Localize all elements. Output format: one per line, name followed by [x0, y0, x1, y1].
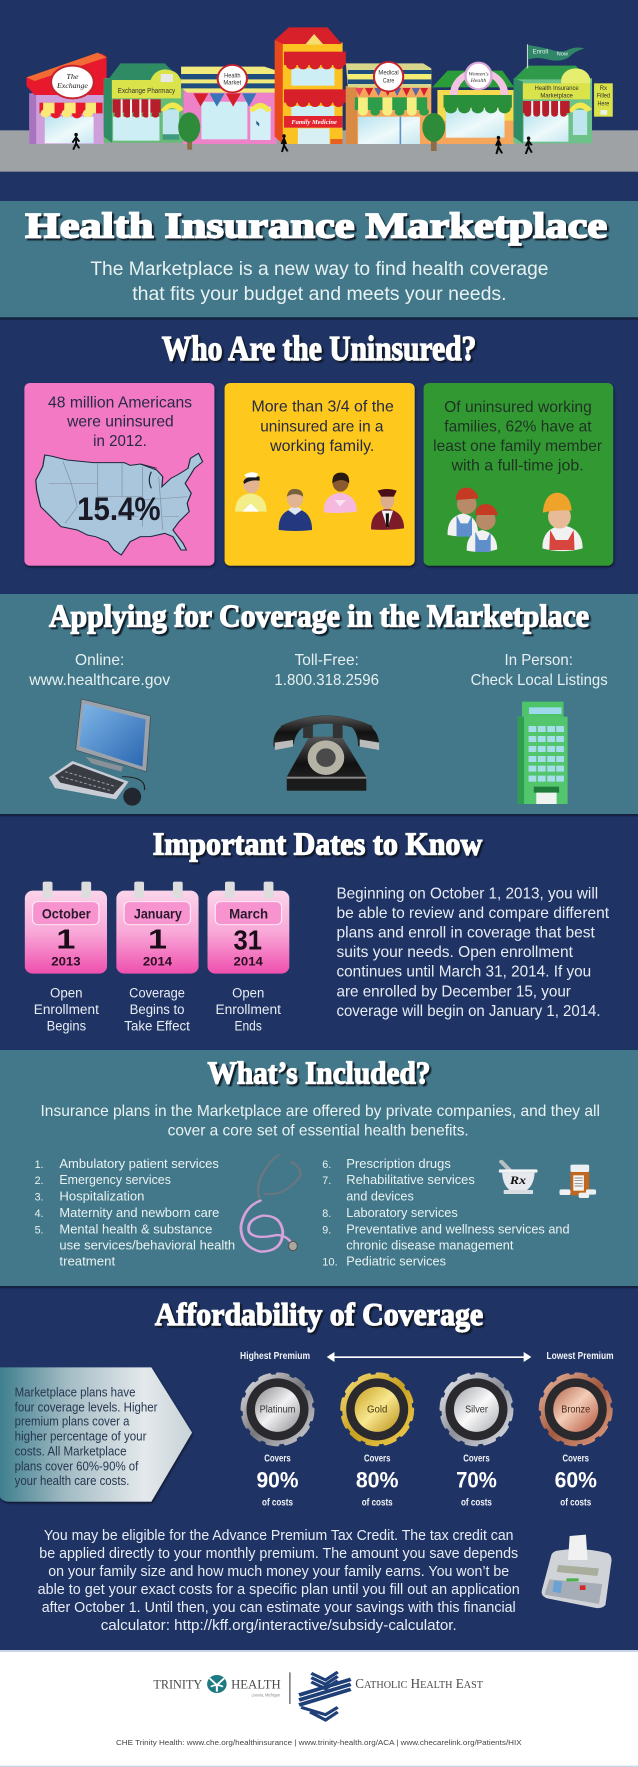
medal: Gold 80%: Covers	[364, 1454, 390, 1464]
icon: stethoscope	[241, 1155, 300, 1252]
list: benefits 6-10: 8.	[322, 1207, 331, 1220]
panel: 48 million Americans	[24, 383, 214, 566]
medal: Bronze 60%	[541, 1374, 611, 1508]
shop: Health Market	[181, 65, 277, 144]
callout: coverage levels: higher percentage of your	[15, 1430, 147, 1444]
contact: toll-free	[274, 652, 379, 689]
medal: Gold 80%: of costs	[362, 1498, 393, 1508]
section: Who Are the Uninsured	[24, 330, 613, 566]
calendar: January 1 2014: 1	[148, 923, 167, 955]
list: benefits 6-10: chronic disease management	[346, 1239, 513, 1253]
contact: in person: In Person:	[505, 652, 573, 669]
footer links: CHE Trinity Health: www.che.org/healthinsurance | www.trinity-health.org/ACA | www.checarelink.org/Patients/HIX	[116, 1738, 522, 1747]
calendar: October 1 2013: 1	[56, 923, 75, 955]
sidewalk	[0, 130, 638, 172]
medal: Gold 80%: Gold	[367, 1405, 387, 1415]
medal: Platinum 90%	[242, 1374, 313, 1508]
callout: coverage levels: Marketplace plans have	[15, 1386, 135, 1400]
panel: 48 million Americans: in 2012.	[93, 432, 147, 450]
panel: working families: Of uninsured working	[444, 398, 592, 416]
medal: Bronze 60%: Covers	[563, 1454, 589, 1464]
text: tax credit paragraph	[38, 1527, 520, 1634]
calendar: October 1 2013	[25, 882, 107, 974]
icon: nurse	[235, 472, 267, 512]
callout: coverage levels: four coverage levels. Higher	[15, 1401, 158, 1415]
medal: Gold 80%: 80%	[356, 1469, 399, 1493]
shop: Exchange Pharmacy	[104, 63, 184, 143]
shop: Exchange Pharmacy: Exchange Pharmacy	[118, 87, 176, 95]
medal: Bronze 60%: Bronze	[561, 1405, 590, 1415]
contact: online: www.healthcare.gov	[28, 672, 170, 689]
shop: Women's Health: Women's	[468, 72, 489, 77]
shop: The Exchange: The	[66, 73, 79, 81]
callout: coverage levels: plans cover 60%-90% of	[15, 1460, 139, 1474]
caption: Coverage Begins to Take Effect: Coverage	[129, 986, 185, 1001]
shop: Health Market: Market	[223, 80, 241, 86]
shop: The Exchange	[26, 53, 107, 144]
caption: Coverage Begins to Take Effect	[124, 986, 190, 1034]
flag: Enroll Now: Now	[557, 52, 569, 57]
text: tax credit paragraph: able to get your exact costs for a specific plan until you fill out an application	[38, 1581, 520, 1598]
list: benefits 6-10: Preventative and wellness services and	[346, 1223, 570, 1237]
text: tax credit paragraph: after October 1. Until then, you can estimate your savings with this financial	[42, 1599, 516, 1616]
calendar: October 1 2013: 2013	[51, 955, 81, 968]
calendar: March 31 2014: 31	[234, 924, 262, 956]
intro text: cover a core set of essential health benefits.	[168, 1122, 469, 1139]
intro text	[90, 257, 548, 304]
panel: working family: More than 3/4 of the	[251, 397, 394, 415]
panel: 48 million Americans: were uninsured	[66, 412, 174, 430]
text: tax credit paragraph: be applied directly to your monthly premium. The amount you save depends	[39, 1545, 518, 1562]
contact: online: Online:	[75, 652, 124, 669]
list: benefits 6-10: 10.	[322, 1256, 338, 1268]
list: benefits 1-5: 2.	[35, 1174, 44, 1187]
caption: Coverage Begins to Take Effect: Begins to	[130, 1002, 185, 1018]
calendar: March 31 2014: 2014	[234, 955, 263, 968]
list: benefits 1-5: 1.	[35, 1158, 44, 1171]
medal: Platinum 90%: Covers	[264, 1454, 291, 1464]
panel: working families: with a full-time job.	[451, 456, 584, 474]
panel: 48 million Americans: 15.4%	[77, 490, 161, 527]
medal: Silver 70%: Covers	[463, 1454, 490, 1464]
shop: Medical Care	[346, 62, 431, 144]
list: benefits 1-5: Ambulatory patient services	[59, 1157, 219, 1172]
text: enrollment dates paragraph: are enrolled by December 15, your	[336, 982, 571, 1000]
intro text: The Marketplace is a new way to find health coverage	[90, 257, 548, 279]
panel: working families	[424, 383, 613, 566]
flag: Enroll Now	[527, 44, 584, 68]
panel: working families: least one family member	[433, 437, 602, 455]
caption: Open Enrollment Begins: Enrollment	[34, 1002, 99, 1018]
tree	[178, 112, 200, 150]
list: benefits 1-5: Emergency services	[59, 1173, 171, 1188]
list: benefits 6-10	[322, 1157, 570, 1269]
list: benefits 6-10: 7.	[322, 1174, 331, 1187]
shop: Health Market: Health	[224, 73, 241, 79]
text: tax credit paragraph: You may be eligible for the Advance Premium Tax Credit. The tax credit can	[44, 1527, 513, 1544]
caption: Open Enrollment Begins: Open	[50, 986, 83, 1001]
list: benefits 6-10: 9.	[322, 1224, 331, 1236]
tree	[422, 113, 445, 151]
calendar: January 1 2014: January	[134, 907, 182, 922]
icon: adding machine calculator	[542, 1535, 612, 1608]
panel: 48 million Americans: 48 million Americans	[48, 393, 192, 411]
medal: Platinum 90%: of costs	[262, 1498, 293, 1508]
section: What's Included	[35, 1055, 600, 1269]
divider	[289, 1672, 291, 1704]
icon: woman	[324, 473, 357, 513]
logo: Trinity Health: TRINITY	[153, 1678, 202, 1692]
shop: Family Medicine	[275, 27, 346, 144]
caption: Open Enrollment Begins: Begins	[47, 1019, 86, 1034]
logo: Catholic Health East: CATHOLIC HEALTH EAST	[355, 1677, 483, 1692]
logo: Catholic Health East	[299, 1672, 483, 1720]
shop: Women's Health: Health	[470, 78, 486, 84]
shop: Women's Health	[432, 63, 515, 144]
icon: mortar and pestle: Rx	[509, 1174, 526, 1187]
intro text	[40, 1103, 600, 1139]
caption: Open Enrollment Ends	[215, 986, 282, 1034]
calendar: January 1 2014	[116, 882, 199, 974]
list: benefits 1-5: treatment	[59, 1255, 115, 1269]
list: benefits 1-5: 5.	[35, 1224, 44, 1236]
heading: Who Are the Uninsured?	[162, 330, 476, 368]
shop: Health Insurance Marketplace: Marketplace	[540, 93, 573, 99]
icon: pill bottle	[559, 1165, 596, 1198]
icon: rotary telephone	[273, 716, 379, 791]
section: Important Dates	[25, 826, 609, 1034]
sign: Rx Filled Here: Rx	[600, 86, 608, 92]
pedestrians	[72, 133, 532, 154]
label: Highest Premium: Highest Premium	[240, 1351, 310, 1362]
contact: toll-free: Toll-Free:	[295, 652, 359, 669]
list: benefits 1-5: 3.	[35, 1191, 44, 1203]
contact: in person	[471, 652, 608, 689]
heading: Health Insurance Marketplace: Health Insurance Marketplace	[25, 205, 607, 245]
caption: Open Enrollment Begins	[34, 986, 99, 1034]
sign: Rx Filled Here: Filled	[597, 93, 610, 99]
shop: The Exchange: Exchange	[56, 82, 88, 90]
heading: Affordability of Coverage	[155, 1296, 483, 1332]
icon: mortar and pestle	[499, 1162, 537, 1194]
illustration: main street storefronts	[0, 27, 638, 172]
list: benefits 1-5: Maternity and newborn care	[59, 1206, 219, 1221]
medal: Bronze 60%: of costs	[560, 1498, 591, 1508]
section: Applying for Coverage	[28, 598, 608, 806]
heading: What’s Included?	[208, 1055, 430, 1091]
icon: two workers	[448, 488, 498, 552]
list: benefits 1-5: Mental health & substance	[59, 1223, 212, 1237]
calendar: March 31 2014	[208, 882, 289, 974]
panel: working family: uninsured are in a	[260, 417, 384, 435]
logo: Trinity Health: HEALTH	[231, 1678, 281, 1692]
chart: US map	[36, 453, 203, 555]
text: tax credit paragraph: on your family size and how much money your family earns. You won’t be	[48, 1563, 509, 1580]
callout: coverage levels	[0, 1367, 192, 1502]
list: benefits 1-5: Hospitalization	[59, 1190, 144, 1204]
list: benefits 6-10: Laboratory services	[346, 1206, 458, 1221]
medal: Silver 70%: 70%	[456, 1469, 497, 1493]
caption: Open Enrollment Ends: Ends	[235, 1019, 262, 1034]
medal: Bronze 60%: 60%	[555, 1469, 597, 1493]
callout: coverage levels: costs. All Marketplace	[15, 1445, 127, 1459]
section: Affordability of Coverage	[0, 1296, 614, 1508]
callout: coverage levels: your health care costs.	[15, 1474, 129, 1489]
shop: Medical Care: Medical	[378, 70, 399, 76]
shop: Health Insurance Marketplace	[513, 66, 592, 143]
intro text: that fits your budget and meets your needs.	[132, 282, 507, 304]
text: enrollment dates paragraph: suits your needs. Open enrollment	[336, 943, 573, 961]
list: benefits 6-10: Pediatric services	[346, 1255, 446, 1269]
contact: toll-free: 1.800.318.2596	[274, 672, 379, 689]
flag: Enroll Now: Enroll	[533, 49, 549, 55]
section: tax credit and footer	[38, 1527, 612, 1747]
caption: Open Enrollment Ends: Open	[232, 986, 264, 1001]
shop: Family Medicine: Family Medicine	[291, 119, 337, 126]
panel: working families: families, 62% have at	[444, 417, 592, 435]
icon: worker with orange hard hat	[542, 493, 583, 551]
sign: Rx Filled Here	[594, 83, 613, 117]
panel: working family: working family.	[269, 437, 374, 455]
list: benefits 1-5	[35, 1157, 235, 1269]
list: benefits 6-10: Rehabilitative services	[346, 1173, 475, 1188]
list: benefits 1-5: use services/behavioral health	[59, 1239, 235, 1253]
medal: Silver 70%	[441, 1374, 511, 1508]
contact: in person: Check Local Listings	[471, 672, 608, 689]
heading: Important Dates to Know	[153, 826, 482, 862]
calendar: January 1 2014: 2014	[143, 955, 173, 968]
text: tax credit paragraph: calculator: http://kff.org/interactive/subsidy-calculator.	[101, 1617, 457, 1634]
icon: man in sweater	[279, 489, 312, 531]
calendar: October 1 2013: October	[42, 907, 91, 922]
medal: Silver 70%: Silver	[465, 1405, 488, 1415]
logo: Trinity Health: Livonia, Michigan	[251, 1693, 280, 1698]
arrow: premium range	[327, 1352, 531, 1362]
caption: Open Enrollment Ends: Enrollment	[215, 1002, 282, 1018]
list: benefits 6-10: and devices	[346, 1190, 414, 1204]
medal: Platinum 90%: Platinum	[260, 1405, 295, 1415]
shop: Health Insurance Marketplace: Health Insurance	[535, 86, 579, 92]
sign: Rx Filled Here: Here	[598, 101, 610, 107]
list: benefits 6-10: 6.	[322, 1158, 331, 1171]
shop: Medical Care: Care	[383, 78, 394, 84]
medal: Platinum 90%: 90%	[257, 1469, 299, 1493]
medal: Silver 70%: of costs	[461, 1498, 492, 1508]
list: benefits 6-10: Prescription drugs	[346, 1157, 451, 1172]
panel: working family	[225, 383, 415, 566]
callout: coverage levels: premium plans cover a	[15, 1415, 130, 1429]
caption: Coverage Begins to Take Effect: Take Effect	[124, 1019, 190, 1034]
contact: online	[28, 652, 170, 689]
text: enrollment dates paragraph	[336, 884, 609, 1020]
calendar: March 31 2014: March	[229, 907, 268, 922]
list: benefits 1-5: 4.	[35, 1207, 44, 1220]
icon: computer	[49, 699, 151, 806]
icon: green office building	[518, 702, 568, 804]
medal: Gold 80%	[342, 1374, 412, 1508]
icon: uniformed man	[371, 489, 404, 530]
logo: Trinity Health	[153, 1675, 281, 1698]
